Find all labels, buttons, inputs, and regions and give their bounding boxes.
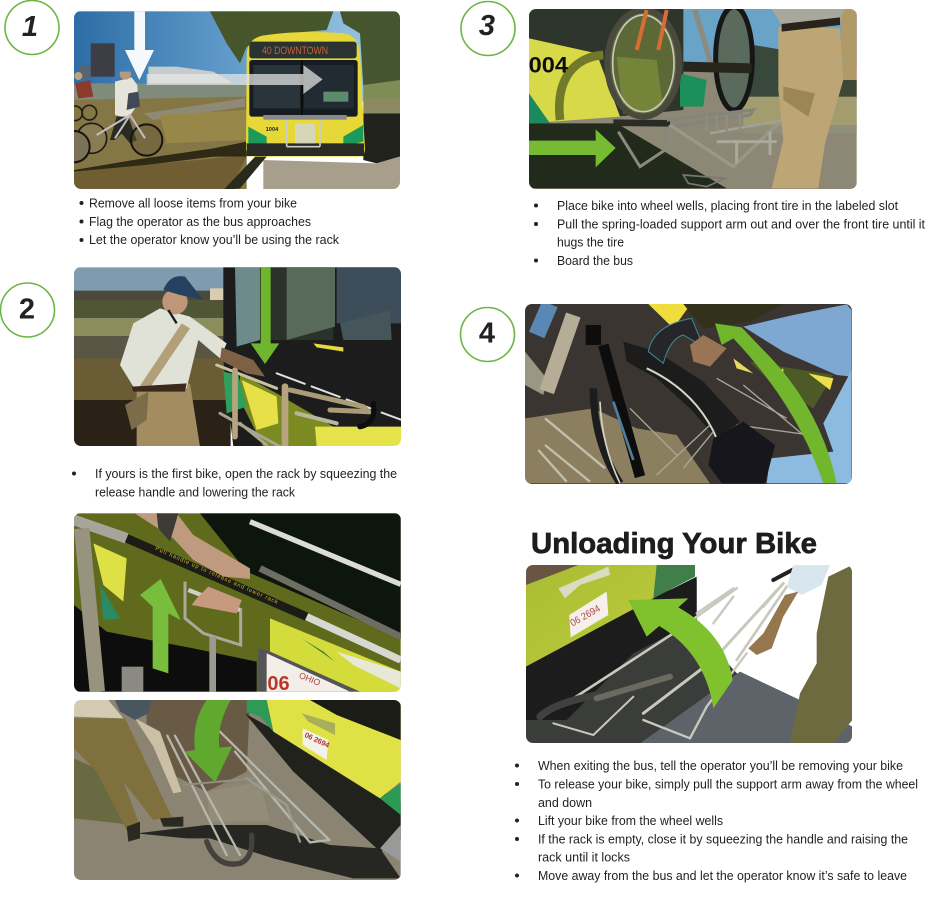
step 3 instructions: Board the bus xyxy=(557,253,633,268)
bus front: 40 DOWNTOWN xyxy=(262,45,328,57)
step 1 number badge xyxy=(5,0,59,54)
bus rear: 06 2694 xyxy=(303,730,332,750)
license plate xyxy=(257,648,360,695)
background xyxy=(529,9,857,189)
release handle xyxy=(185,582,241,692)
unloading instructions xyxy=(515,758,918,883)
arrow: approach direction xyxy=(147,65,323,94)
gloved hand xyxy=(708,422,775,483)
bus rear xyxy=(526,565,697,720)
camera bracket xyxy=(122,667,143,692)
step 3 instructions xyxy=(534,198,925,268)
rack frame xyxy=(217,365,402,447)
pavement and dirt xyxy=(74,700,401,880)
step 1 instructions: Flag the operator as the bus approaches xyxy=(89,214,311,229)
folded-down rack xyxy=(167,732,329,864)
cyclist with bike xyxy=(74,68,164,164)
photo: support arm over tire xyxy=(525,304,853,484)
bike on rack xyxy=(607,7,752,117)
roadway and shadow xyxy=(223,98,400,190)
bus front xyxy=(246,32,365,157)
arrow: down to cyclist xyxy=(125,11,154,80)
hand on rail xyxy=(135,513,250,613)
arrow: curving up xyxy=(715,323,837,483)
step 3 number badge: 3 xyxy=(479,10,495,42)
man with helmet and bag xyxy=(120,276,265,447)
tire tread xyxy=(623,342,740,438)
step 1 number badge: 1 xyxy=(22,11,38,43)
photo: placing bike in the rack xyxy=(529,7,857,189)
arrow: curving upward xyxy=(628,598,733,708)
step 4 number badge: 4 xyxy=(479,318,495,350)
step 1 instructions: Remove all loose items from your bike xyxy=(89,196,297,210)
photo: squeezing the release handle xyxy=(74,513,401,695)
unloading instructions: When exiting the bus, tell the operator you’ll be removing your bike xyxy=(538,758,903,773)
bus side: 004 xyxy=(529,53,569,78)
bus rear xyxy=(245,700,401,862)
step 2 instructions xyxy=(72,466,397,500)
bike frame and fork xyxy=(537,304,640,483)
background xyxy=(526,565,853,745)
step 2 number badge xyxy=(0,283,54,337)
person with helmet xyxy=(74,700,183,842)
step 3 instructions: Pull the spring-loaded support arm out and over the front tire until it xyxy=(557,216,925,232)
unloading instructions: To release your bike, simply pull the support arm away from the wheel xyxy=(538,776,918,792)
trees xyxy=(210,11,400,100)
arrow: downward curve xyxy=(185,700,232,782)
field background xyxy=(74,267,402,447)
photo: removing the bike xyxy=(526,565,853,745)
license plate: OHIO xyxy=(298,670,322,688)
person's arm and legs xyxy=(748,565,852,743)
heading: unloading your bike: Unloading Your Bike xyxy=(531,528,817,560)
river and field xyxy=(74,83,247,190)
bus front: 1004 xyxy=(266,127,279,133)
arrow: right xyxy=(529,129,616,167)
background xyxy=(525,304,853,484)
bus panels xyxy=(74,513,401,692)
bus rear: 06 2694 xyxy=(569,603,603,629)
bus side xyxy=(529,9,727,188)
rack being raised xyxy=(540,569,793,738)
step 2 instructions: release handle and lowering the rack xyxy=(95,484,295,500)
unloading instructions: Move away from the bus and let the operator know it’s safe to leave xyxy=(538,868,907,883)
handle text: Pull handle up to release and lower rack xyxy=(154,546,279,606)
bus side and windows xyxy=(223,267,402,447)
step 2 number badge: 2 xyxy=(19,294,35,326)
skyline buildings xyxy=(80,43,233,83)
step 1 instructions: Let the operator know you’ll be using the rack xyxy=(89,232,339,247)
photo: rack lowered xyxy=(74,700,401,880)
support arm xyxy=(648,318,703,363)
step 3 number badge xyxy=(461,2,515,56)
rails xyxy=(74,520,401,692)
license plate: 06 xyxy=(267,673,290,695)
wheel spokes xyxy=(630,368,810,475)
unloading instructions: Lift your bike from the wheel wells xyxy=(538,813,723,828)
arrow: lower rack xyxy=(251,267,279,364)
step 1 instructions xyxy=(80,196,339,247)
rack on bus xyxy=(613,110,783,187)
step 2 instructions: If yours is the first bike, open the rack by squeezing the xyxy=(95,466,397,481)
unloading instructions: rack until it locks xyxy=(538,850,630,864)
unloading instructions: and down xyxy=(538,795,592,810)
unloading instructions: If the rack is empty, close it by squeezing the handle and raising the xyxy=(538,832,908,846)
person's legs xyxy=(772,9,857,188)
step 3 instructions: Place bike into wheel wells, placing front tire in the labeled slot xyxy=(557,198,898,213)
step 3 instructions: hugs the tire xyxy=(557,234,624,250)
blue sleeves xyxy=(743,304,852,483)
photo: flagging the bus xyxy=(58,11,401,190)
hand on arm xyxy=(690,335,727,367)
step 4 number badge xyxy=(460,308,514,362)
arrow: up xyxy=(140,579,181,673)
photo: opening the rack xyxy=(74,267,402,447)
